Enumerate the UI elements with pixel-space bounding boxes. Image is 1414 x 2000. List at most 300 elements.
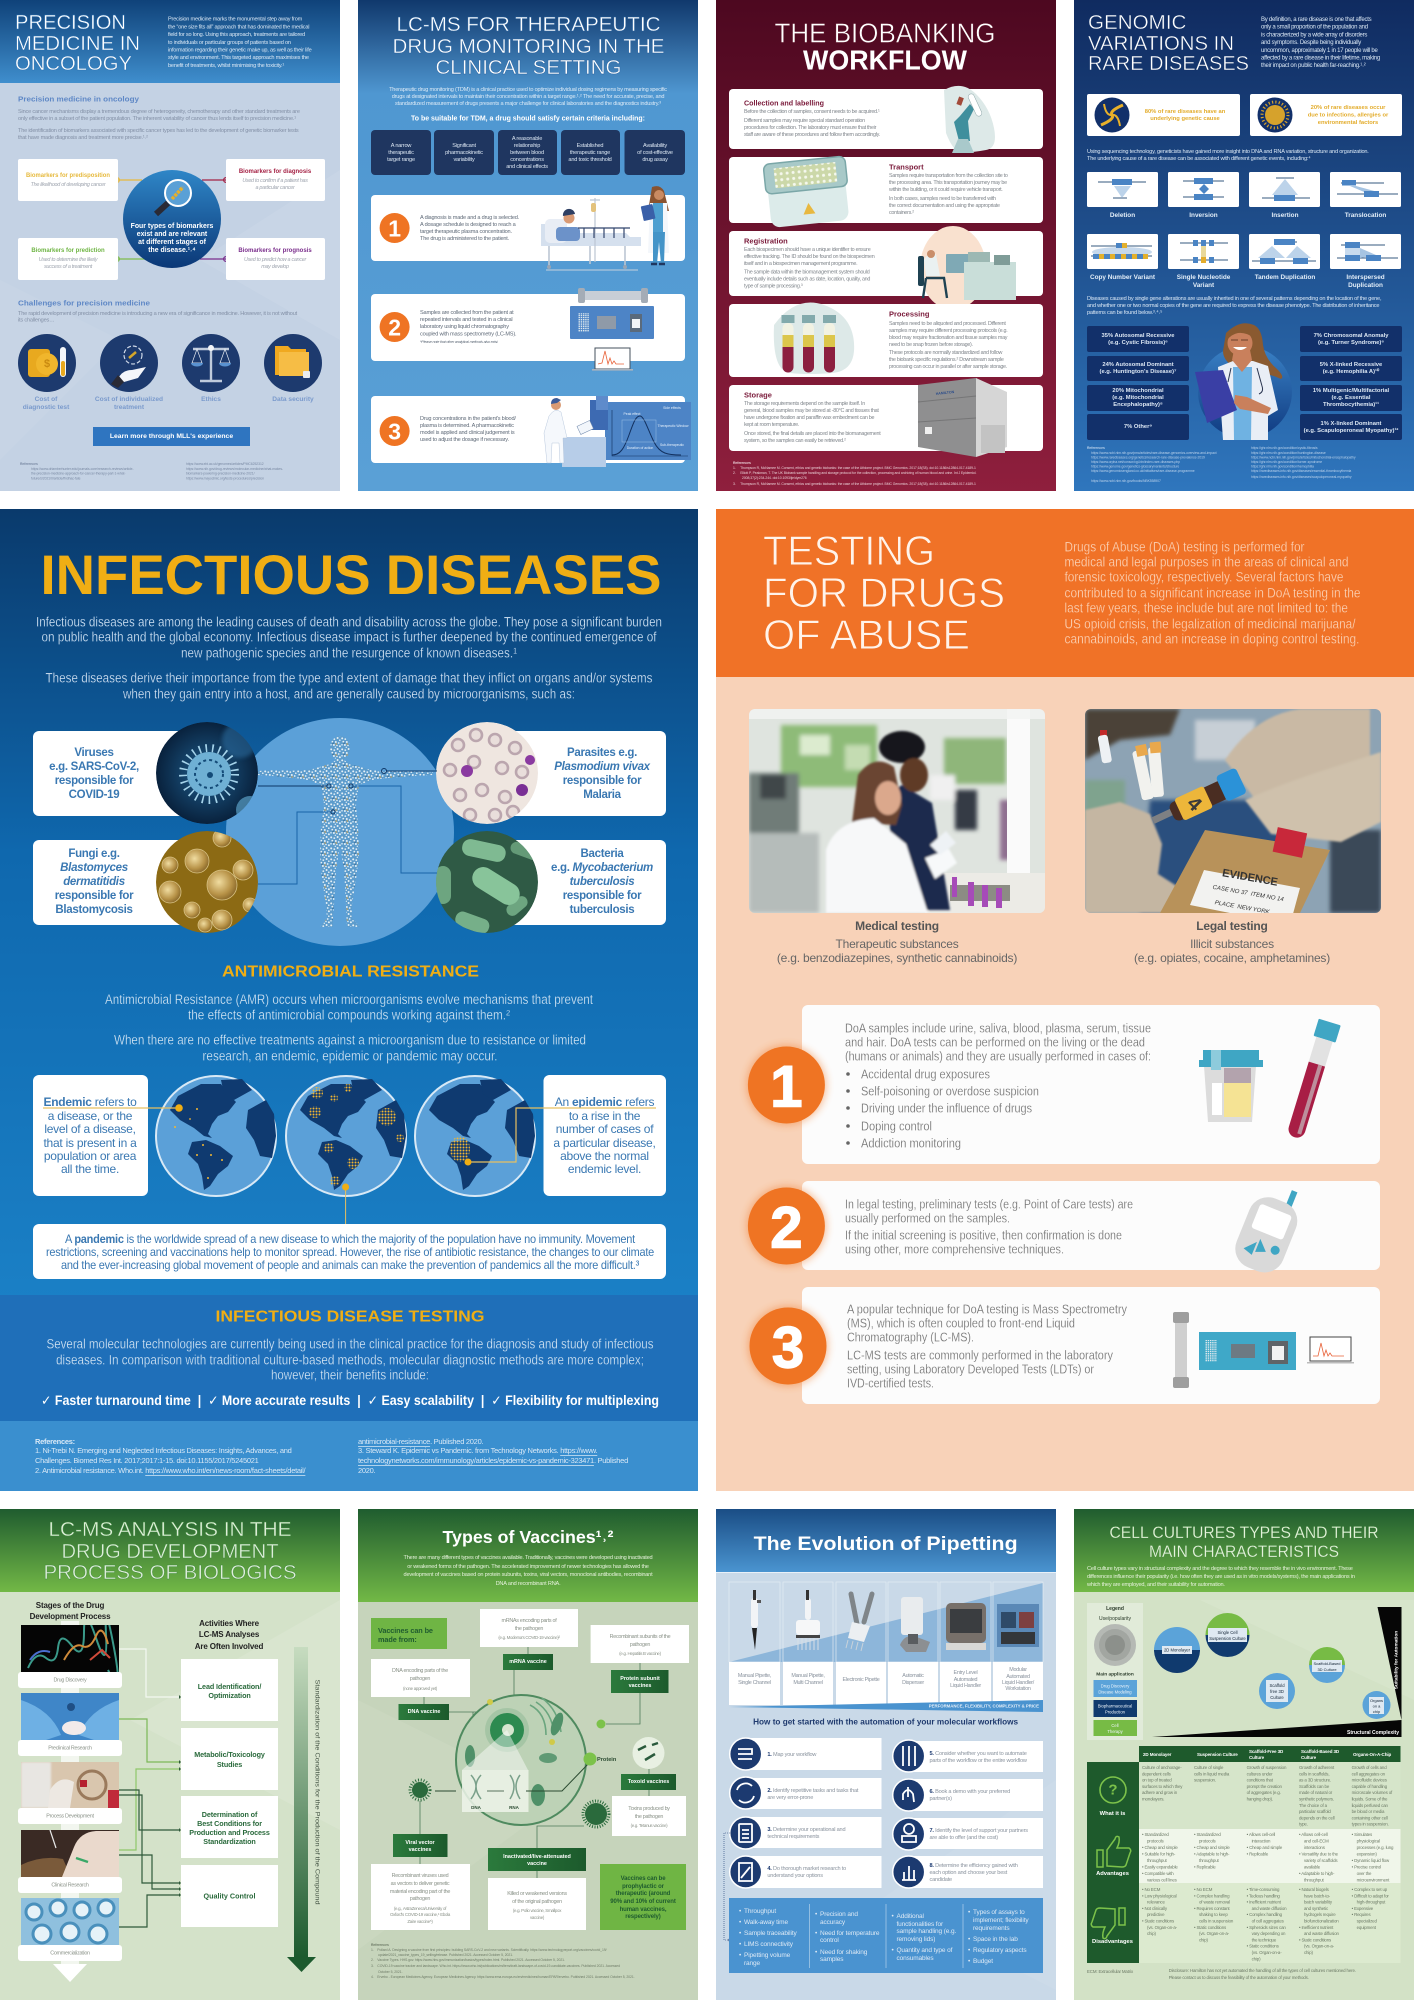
considerations box: •	[739, 1918, 742, 1926]
box: DNA: (none approved yet)	[403, 1686, 438, 1690]
row: what it is: microscale volumes of	[1352, 1790, 1393, 1795]
bubble: organs on a chip	[1362, 1691, 1390, 1719]
icon: glucometer	[1229, 1178, 1309, 1279]
stage: drug discovery: Drug Discovery	[54, 1678, 87, 1684]
considerations box: •	[739, 1908, 742, 1914]
activity: determination of best conditions	[181, 1796, 278, 1858]
product labels: Single Channel	[738, 1680, 771, 1686]
microorganism diagram	[33, 718, 666, 946]
activity: lead identification: Optimization	[208, 1690, 251, 1700]
icon labels: treatment	[114, 404, 145, 410]
box: recombinant viruses: material encoding part of the	[390, 1889, 450, 1895]
references: 4. Ervebo - European Medicines Agency. European Medicines Agency. https://www.ema.europa.eu/en/medicines/human/EPAR/ervebo. Published 2021. Accessed October 5, 2021.	[371, 1975, 635, 1979]
step 3 card: used to adjust the dosage if necessary.	[420, 437, 509, 443]
row: what it is: be blood or media	[1352, 1809, 1385, 1814]
intro: Therapeutic drug monitoring (TDM) is a clinical practice used to optimize individual dosing regimens by measuring specific	[389, 87, 667, 93]
title: MAIN CHARACTERISTICS	[1149, 1543, 1339, 1561]
globe: pandemic	[286, 1076, 406, 1196]
row: what it is: depends on the cell	[1299, 1815, 1335, 1820]
endemic and epidemic callout lines	[43, 1104, 656, 1224]
stage: process development	[18, 1762, 122, 1824]
title: TESTING	[763, 526, 935, 574]
references: References	[733, 461, 751, 465]
row: what it is: liquids perfused can	[1352, 1802, 1389, 1807]
bubble: 2D monolayer	[1154, 1627, 1200, 1673]
card: endemic: level of a disease,	[44, 1122, 136, 1136]
caption: legal testing: Illicit substances	[1190, 937, 1274, 951]
row: advantages: • Replicable	[1194, 1864, 1216, 1869]
row: disadvantages: relevance	[1147, 1899, 1165, 1904]
considerations box: Space in the lab	[973, 1936, 1018, 1942]
references: References:	[35, 1436, 75, 1446]
variant card: tandem duplication	[1249, 234, 1320, 269]
criteria text: concentrations	[510, 157, 544, 163]
icon labels: Cost of	[35, 396, 58, 402]
intro: is characterized by a wide array of disorders	[1261, 32, 1367, 38]
stat card: genetic cause: 80% of rare diseases have an	[1145, 109, 1226, 115]
callout: prophylactic or therapeutic	[600, 1864, 686, 1930]
card: collection and labelling: Before the collection of samples, consent needs to be acquired.¹	[744, 109, 880, 115]
criteria text: Established	[577, 143, 603, 149]
variant card: interspersed duplication	[1330, 234, 1401, 269]
references: 2. Vaccine Types. HHS.gov. https://www.hhs.gov/immunization/basics/types/index.html. Published 2021. Accessed October 5, 2021.	[371, 1958, 565, 1962]
references: 1. Pollard A. Designing a vaccine from first principles: building SARS-CoV-2 and new variants. Scientifically. https://www.technologyreport.org/vaccines/covid_19/	[371, 1948, 607, 1952]
panel: the biobanking workflow	[716, 0, 1056, 491]
text block: challenges: The rapid development of precision medicine is introducing a new era of significance in medicine. However, it is not without	[18, 311, 298, 317]
stat card: infections: due to infections, allergies or	[1308, 112, 1389, 118]
text: sequencing: The underlying cause of a rare disease can be associated with different genetic events, including:⁴	[1087, 155, 1311, 162]
product labels: Electronic Pipette	[843, 1677, 880, 1683]
row: advantages: • Adaptable to high-	[1194, 1851, 1230, 1856]
row: disadvantages: (vs. Organ-on-a-	[1147, 1924, 1178, 1929]
references: update/2021_vaccine_types_19_selling/release. Published 2021. Accessed October 5, 2021.	[378, 1953, 513, 1957]
row: disadvantages: (vs. Organ-on-a-	[1304, 1943, 1335, 1948]
card: epidemic: above the normal	[560, 1149, 649, 1163]
row: advantages: • Simulates	[1352, 1832, 1373, 1836]
row: advantages: • Replicable	[1247, 1851, 1269, 1856]
references: October 5, 2021.	[378, 1970, 403, 1974]
variant labels row 1: Inversion	[1189, 212, 1218, 218]
row: advantages	[1096, 1832, 1394, 1882]
card: diagnosis: a particular cancer	[255, 185, 295, 191]
icon: manual pipette multi	[796, 1590, 820, 1650]
step 1: Self-poisoning or overdose suspicion	[861, 1084, 1039, 1098]
row: advantages: • Versatility due to the	[1299, 1851, 1339, 1856]
card: epidemic: number of cases of	[556, 1122, 654, 1136]
label: viral vector: Viral vector	[405, 1840, 436, 1846]
box: protein subunit: (e.g. Hepatitis B vaccine)	[619, 1650, 662, 1656]
row: what it is: liquids. Some of the	[1352, 1796, 1388, 1801]
criteria text: target range	[387, 157, 415, 163]
step 3 card: 3	[388, 418, 401, 444]
subheading: How to get started with the automation of your molecular workflows	[753, 1718, 1019, 1726]
considerations box: Sample traceability	[744, 1930, 798, 1936]
steps text right: candidate	[930, 1877, 952, 1883]
criteria text: pharmacokinetic	[445, 150, 483, 156]
card: processing	[729, 302, 1043, 377]
box: recombinant viruses: Zaire vaccine⁵)	[407, 1918, 433, 1924]
row: disadvantages: equipment	[1357, 1924, 1377, 1929]
card: endemic: population or area	[44, 1149, 137, 1163]
caption: medical testing: Medical testing	[855, 919, 939, 933]
card: transport: Samples require transportation from the collection site to	[889, 173, 1008, 179]
card: registration: type of sample processing.³	[744, 284, 803, 290]
considerations box: Types of assays to	[973, 1908, 1025, 1916]
row: disadvantages: vary depending on	[1252, 1931, 1286, 1936]
row: disadvantages: shaking to keep	[1199, 1912, 1228, 1917]
row: advantages: microenvironment	[1357, 1877, 1390, 1882]
card: transport: the processing area. This transportation journey may be	[889, 180, 1007, 186]
card: storage: have undergone fixation and paraffin wax embedment can be	[744, 415, 874, 421]
table header: Culture	[1301, 1754, 1317, 1760]
considerations box: range	[744, 1960, 761, 1966]
references: 2008;37(2):234-244. doi:10.1093/ije/dym276	[742, 476, 807, 480]
wedge	[729, 1583, 1043, 1662]
step 1: Driving under the influence of drugs	[861, 1100, 1032, 1116]
section: infectious disease testing: diseases. In comparison with traditional culture-based methods, molecular diagnostic methods are more complex;	[56, 1352, 644, 1368]
box: protein subunit: Recombinant subunits of the	[610, 1634, 671, 1640]
title: RARE DISEASES	[1088, 52, 1249, 74]
variant labels row 2: Single Nucleotide	[1177, 274, 1231, 280]
row: disadvantages: • Tedious handling	[1247, 1893, 1280, 1898]
label: viral vector	[393, 1834, 448, 1857]
box: killed or weakened: vaccine)	[530, 1914, 545, 1920]
box: killed or weakened: (e.g. Polio vaccine, Smallpox	[513, 1908, 562, 1912]
step 2	[746, 1181, 1380, 1270]
intro: differences influence their popularity (i.e. how often they are used as in vitro models/systems), the main applications in	[1087, 1574, 1355, 1580]
step 2 card: coupled with mass spectrometry (LC-MS).	[420, 332, 517, 338]
stat card: infections: 20% of rare diseases occur	[1311, 105, 1386, 111]
axis: suitability for automation	[1378, 1607, 1402, 1720]
intro text: Drugs of Abuse (DoA) testing is performed for	[1064, 540, 1305, 554]
row: what it is: on top of treated	[1142, 1777, 1172, 1782]
intro text: Infectious diseases are among the leading causes of death and disability across the globe. They pose a significant burden	[36, 614, 662, 630]
connector arrows	[119, 1649, 181, 1927]
callout: prophylactic or therapeutic: human vaccines,	[620, 1907, 667, 1913]
intro text: last few years, these include but are not limited to: the	[1064, 600, 1348, 616]
arrows	[435, 1762, 590, 1791]
button: Learn more through MLL's experience	[110, 433, 233, 440]
card: epidemic	[544, 1075, 666, 1196]
step 3 card: plasma is determined. A pharmacokinetic	[420, 423, 514, 429]
considerations box: •	[815, 1930, 818, 1936]
steps text left: are very error-prone	[767, 1795, 813, 1801]
inheritance boxes left	[1087, 326, 1189, 440]
card: processing: These protocols are normally standardized and follow	[889, 350, 1002, 356]
card: bacteria: responsible for	[563, 890, 642, 902]
card: transport: within the building, or it could require vehicle transport.	[888, 187, 1003, 193]
intro text	[36, 614, 662, 702]
text: AMR: the effects of antimicrobial compounds working against them.²	[188, 1008, 510, 1022]
row: what it is: monolayers.	[1142, 1796, 1164, 1801]
card: endemic: all the time.	[61, 1162, 119, 1176]
title: OF ABUSE	[763, 610, 970, 658]
row: disadvantages: the technique	[1252, 1937, 1277, 1942]
row: disadvantages: specialized	[1357, 1918, 1377, 1923]
step 2: If the initial screening is positive, then confirmation is done	[845, 1228, 1122, 1242]
box: recombinant viruses: as vectors to deliver genetic	[391, 1881, 450, 1887]
panel: LC-MS for therapeutic drug monitoring	[358, 0, 698, 491]
card: predisposition: Biomarkers for predisposition	[26, 173, 110, 179]
step 1 card: A dosage schedule is designed to reach a	[420, 222, 517, 228]
box: mRNA: the pathogen	[515, 1626, 543, 1632]
box: mRNA	[480, 1609, 578, 1647]
stage connector stem	[61, 1621, 79, 1965]
legend: Cell	[1111, 1722, 1119, 1728]
inset: DNA to RNA: DNA	[471, 1804, 482, 1810]
intro text: benefit of treatments, whilst minimising the toxicity.¹	[168, 63, 284, 69]
step 2: In legal testing, preliminary tests (e.g. Point of Care tests) are	[845, 1196, 1133, 1212]
icon labels: Cost of individualized	[95, 396, 163, 402]
row: what it is: made of natural or	[1299, 1790, 1333, 1795]
bubble: single cell suspension: Single Cell	[1217, 1630, 1238, 1634]
row: disadvantages: • No ECM	[1142, 1886, 1161, 1892]
references: 2. Antimicrobial resistance. Who.int. https://www.who.int/en/news-room/fact-sheets/detail/	[35, 1466, 305, 1474]
references: https://ghr.nlm.nih.gov/condition/huntington-disease	[1251, 451, 1326, 455]
box: recombinant viruses	[371, 1864, 470, 1930]
card: prognosis: may develop	[261, 264, 289, 270]
step icons	[730, 1738, 925, 1888]
variant card: copy number variant	[1087, 234, 1158, 269]
card: bacteria: tuberculosis	[570, 904, 634, 916]
row: disadvantages: • Spheroids sizes can	[1247, 1924, 1286, 1929]
references: 3. COVID-19 vaccine tracker and landscape. Who.int. https://www.who.int/publications/m/item/draft-landscape-of-covid-19-candidate-vaccines. Published 2021. Accessed	[371, 1964, 620, 1968]
stage: drug discovery	[18, 1625, 122, 1688]
steps text left: 1. Map your workflow	[767, 1752, 816, 1758]
inheritance boxes left: 20% Mitochondrial	[1112, 388, 1164, 394]
activity: determination of best conditions: Standardization	[203, 1836, 256, 1846]
card: storage: general, blood samples may be stored at -80°C and tissues that	[744, 408, 879, 414]
text block: mechanisms: The identification of biomarkers associated with specific cancer types has led to the development of genetic biomarker tests	[18, 128, 299, 134]
steps text right: partner(s)	[930, 1796, 952, 1802]
button	[93, 427, 250, 446]
step 3: Chromatography (LC-MS).	[847, 1330, 974, 1344]
card: viruses: Viruses	[74, 747, 114, 759]
considerations box: consumables	[896, 1954, 934, 1962]
title: The Evolution of Pipetting	[754, 1533, 1018, 1555]
step 2 card: laboratory using liquid chromatography	[420, 324, 509, 330]
row: advantages: • Easily expandable	[1142, 1864, 1178, 1869]
heading: challenges: Challenges for precision medicine	[18, 298, 151, 308]
product labels	[729, 1662, 1043, 1705]
intro: Cell culture types vary in structural complexity and the degree to which they resemble the in vivo environment. These	[1087, 1566, 1353, 1572]
references: https://www.drlamberhunter.edu/journals-core/research-reviews/article-	[31, 467, 134, 471]
card: registration: effective tracking. The ID should be found on the biospecimen	[744, 254, 875, 260]
label: inactivated vaccine: vaccine	[527, 1861, 547, 1867]
row: what it is: microfluidic devices	[1352, 1777, 1388, 1782]
row: what it is: cultures under	[1247, 1771, 1273, 1776]
steps text right: 8. Determine the efficiency gained with	[930, 1863, 1018, 1869]
table	[1087, 1746, 1400, 1963]
icon labels: diagnostic test	[23, 404, 70, 410]
product labels: Automatic	[902, 1673, 924, 1679]
bubble: 2D monolayer: 2D Monolayer	[1164, 1648, 1191, 1652]
step 2 card	[371, 294, 685, 361]
image: virus	[156, 722, 264, 824]
bubble: scaffold-based 3D culture: 3D Culture	[1317, 1666, 1337, 1672]
step 2 card: *Please note that other analytical methods also exist.	[420, 340, 499, 344]
criteria text: variability	[453, 157, 475, 163]
references: 1. Ni-Trebi N. Emerging and Neglected Infectious Diseases: Insights, Advances, and	[35, 1446, 292, 1454]
icon labels: Ethics	[201, 396, 221, 402]
row: what it is: types in suspension.	[1352, 1821, 1389, 1826]
card: endemic	[33, 1075, 148, 1196]
step cards	[745, 1738, 1043, 1888]
box: toxins: the pathogen	[635, 1814, 663, 1820]
variant labels row 2: Duplication	[1348, 282, 1383, 288]
virus: inactivated	[583, 1801, 609, 1827]
illustration: storage machine: HAMILTON	[936, 390, 955, 396]
icon labels: Data security	[272, 396, 314, 402]
intro text: to individuals or particular groups of patients based on	[168, 40, 291, 46]
row: disadvantages: and synthetic	[1304, 1905, 1329, 1910]
stat card: genetic cause: underlying genetic cause	[1150, 116, 1221, 122]
step 1: and hair. DoA tests can be performed on the living or the dead	[845, 1034, 1145, 1050]
criteria text: A reasonable	[512, 136, 542, 142]
central circle: Four types of biomarkers	[131, 222, 214, 230]
label: DNA vaccine: DNA vaccine	[408, 1709, 440, 1715]
considerations box: Budget	[973, 1958, 993, 1964]
row: what it is: capable of handling	[1352, 1783, 1388, 1788]
considerations box: •	[739, 1940, 742, 1948]
virus	[410, 1780, 430, 1800]
row: what it is: particular scaffold	[1299, 1809, 1331, 1814]
title	[774, 18, 996, 76]
intro text: These diseases derive their importance from the type and extent of damage that they inflict on organs and/or systems	[46, 670, 653, 686]
card: diagnosis: Biomarkers for diagnosis	[239, 169, 312, 175]
references: antimicrobial-resistance. Published 2020.	[358, 1436, 483, 1446]
row: disadvantages: • Low physiological	[1142, 1893, 1177, 1898]
row: advantages: • Precise control	[1352, 1864, 1381, 1869]
card: fungi: Fungi e.g.	[68, 848, 120, 860]
step 3: IVD-certified tests.	[847, 1376, 934, 1390]
card: parasites: Parasites e.g.	[567, 747, 637, 759]
row: what it is: dependent cells	[1142, 1771, 1172, 1776]
image: bacteria	[435, 831, 541, 936]
table header: Scaffold-Free 3D	[1249, 1748, 1284, 1754]
card: prognosis	[226, 238, 325, 280]
row: disadvantages: • Static conditions	[1299, 1937, 1332, 1942]
globe: epidemic	[415, 1076, 535, 1196]
row: what it is: conditions that	[1247, 1777, 1274, 1782]
criteria text: Availability	[643, 143, 667, 149]
references: References	[371, 1943, 389, 1947]
card: storage: system, so the samples can easily be retrieved.²	[744, 438, 846, 444]
title: WORKFLOW	[803, 44, 968, 76]
section: infectious disease testing: INFECTIOUS DISEASE TESTING	[216, 1308, 484, 1326]
callout: prophylactic or therapeutic: therapeutic (around	[616, 1891, 671, 1897]
card: viruses: responsible for	[55, 775, 134, 787]
bubble: organs on a chip: on a	[1373, 1703, 1381, 1708]
card: predisposition	[18, 159, 118, 201]
step 1: Addiction monitoring	[861, 1136, 961, 1150]
stat card: genetic cause	[1087, 94, 1240, 136]
heading: antimicrobial resistance: ANTIMICROBIAL RESISTANCE	[222, 964, 479, 980]
references: References	[1087, 446, 1105, 450]
heading: stages: Development Process	[30, 1612, 111, 1620]
icon: automatic dispenser	[900, 1597, 930, 1652]
activity: metabolic toxicology: Studies	[217, 1760, 242, 1768]
inheritance boxes left: 35% Autosomal Recessive	[1102, 333, 1175, 339]
row: disadvantages: • Complex handling	[1194, 1893, 1230, 1898]
variant card: translocation	[1330, 172, 1401, 207]
row: disadvantages: • Inefficient nutrient	[1299, 1924, 1334, 1929]
icon: cost of diagnostic test: $	[44, 358, 50, 370]
cell	[456, 1695, 586, 1825]
title: THE BIOBANKING	[774, 18, 996, 48]
references: 1. Thompson R, McNamee M. Consent, ethics and genetic biobanks: the case of the Athlome project. BMC Genomics. 2017;18(S8). doi:10.1186/s12864-017-4189-1	[733, 466, 976, 470]
criteria text: relationship	[514, 143, 540, 149]
references: 2020.	[358, 1466, 376, 1474]
card: collection and labelling: Collection and labelling	[744, 98, 824, 108]
title: CELL CULTURES TYPES AND THEIR	[1110, 1524, 1378, 1542]
row: disadvantages: • Difficult to adapt for	[1352, 1893, 1389, 1898]
row: what it is: The choice of a	[1299, 1802, 1328, 1807]
variant labels row 2: Tandem Duplication	[1255, 274, 1315, 280]
intro text: information regarding their genetic make up, as well as their life	[168, 48, 312, 54]
step 1 card: A diagnosis is made and a drug is selected.	[420, 215, 520, 221]
globe: endemic	[156, 1076, 276, 1196]
card: endemic: that is present in a	[43, 1136, 137, 1150]
illustration: lab scientist and PK chart: Duration of action	[627, 446, 653, 450]
box: mRNA: (e.g. Moderna's COVID-19 vaccine)²	[498, 1634, 560, 1640]
references: https://www.genome.gov/genetics-glossary/variants/structure	[1091, 464, 1179, 468]
stage: preclinical research	[18, 1693, 122, 1756]
product labels: Dispenser	[902, 1680, 924, 1686]
row: advantages: processes (e.g. lung	[1357, 1844, 1394, 1850]
card: registration	[729, 226, 1043, 310]
big arrow: standardization	[287, 1647, 316, 1972]
table header: 2D Monolayer	[1143, 1752, 1172, 1756]
legend	[1087, 1603, 1143, 1740]
criteria text: A narrow	[391, 143, 412, 149]
step 3: LC-MS tests are commonly performed in the laboratory	[847, 1348, 1113, 1362]
card: storage: kept at room temperature.	[744, 422, 799, 428]
references: technologynetworks.com/immunology/articles/epidemic-vs-pandemic-323471. Published	[358, 1456, 628, 1464]
table header: Organs-On-A-Chip	[1353, 1752, 1391, 1756]
label: inactivated vaccine: Inactivated/live-attenuated	[503, 1854, 571, 1860]
card: fungi	[33, 840, 203, 925]
central circle: exist and are relevant	[137, 230, 208, 238]
card: registration: Each biospecimen should have a unique identifier to ensure	[744, 247, 871, 253]
intro text: the “one size fits all” approach that has dominated the medical	[168, 24, 309, 30]
legend: Disease Modeling	[1098, 1689, 1132, 1694]
section: infectious disease testing: ✓ Faster turnaround time | ✓ More accurate results | ✓ Easy scalability | ✓ Flexibility for multiplexing	[41, 1393, 659, 1408]
intro text: Precision medicine marks the monumental step away from	[168, 17, 303, 23]
card: epidemic: a particular disease,	[553, 1136, 656, 1150]
stat card: infections: environmental factors	[1318, 120, 1378, 126]
title: LC-MS ANALYSIS IN THE	[48, 1518, 292, 1540]
box: killed or weakened: of the original pathogen	[512, 1899, 562, 1905]
legend: Main application	[1096, 1672, 1134, 1678]
inheritance boxes left: 7% Other⁹	[1124, 424, 1152, 430]
references: https://www.genomicsengland.co.uk/initiatives/rare-disease-programme	[1091, 469, 1195, 473]
inheritance boxes right: (e.g. Turner Syndrome)⁶	[1318, 340, 1384, 346]
image: blood cells	[436, 722, 538, 824]
box: protein subunit	[591, 1625, 689, 1663]
considerations box: Precision and	[820, 1910, 858, 1918]
intro text: field for so long. Using this approach, treatments are tailored	[168, 32, 305, 38]
label: protein: Protein	[597, 1757, 617, 1763]
inheritance boxes left: (e.g. Cystic Fibrosis)⁶	[1108, 340, 1168, 346]
legend: Production	[1105, 1709, 1126, 1714]
row: disadvantages: • Requires	[1352, 1912, 1371, 1917]
performance bar: PERFORMANCE, FLEXIBILITY, COMPLEXITY & PRICE	[929, 1704, 1039, 1708]
section: infectious disease testing	[0, 1295, 698, 1421]
considerations box: •	[968, 1936, 971, 1942]
title: ONCOLOGY	[15, 52, 132, 74]
considerations box: Regulatory aspects	[973, 1946, 1027, 1954]
